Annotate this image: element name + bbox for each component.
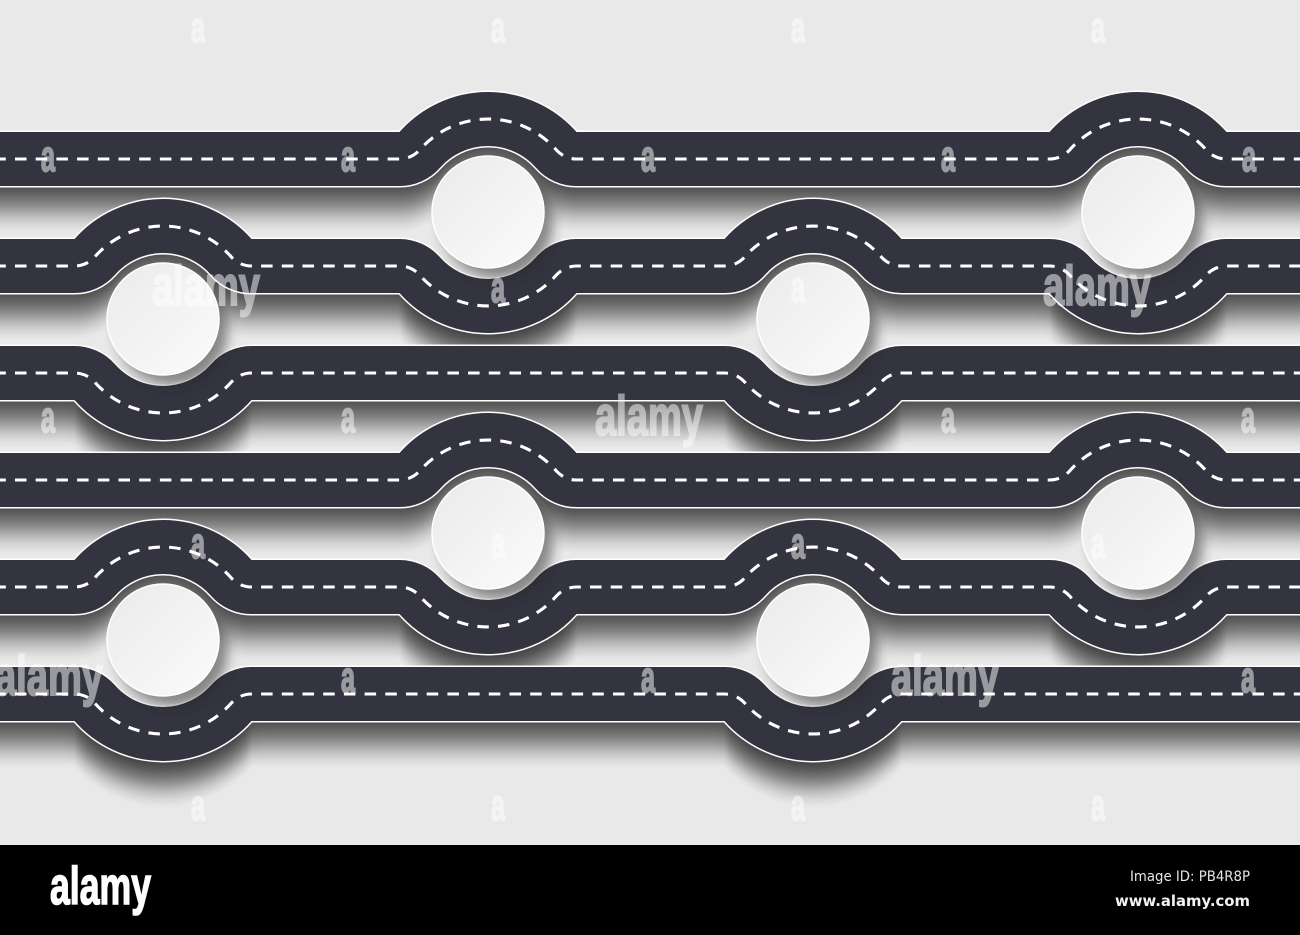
road 4 (0, 440, 1300, 480)
circle marker 2 (1082, 156, 1203, 278)
watermark overlay: a (1091, 519, 1105, 568)
road drop shadows (0, 122, 1300, 779)
circle marker 8 (757, 584, 878, 706)
circle marker 6 (1082, 477, 1203, 599)
watermark overlay: alamy (595, 384, 703, 447)
watermark overlay: a (1091, 781, 1105, 830)
circle marker 5 (432, 477, 553, 599)
road 1 (0, 119, 1300, 159)
watermark overlay: a (641, 653, 655, 702)
watermark overlay: a (791, 263, 805, 312)
watermark overlay: a (1242, 132, 1256, 181)
watermark overlay: a (191, 781, 205, 830)
watermark overlay: a (191, 3, 205, 52)
image id: Image ID: PB4R8P (1130, 869, 1250, 885)
circle marker 3 (107, 263, 228, 385)
footer bar (0, 845, 1300, 935)
road 6 (0, 694, 1300, 734)
website: www.alamy.com (1115, 892, 1250, 910)
footer logo: alamy (50, 857, 151, 916)
circle marker 4 (757, 263, 878, 385)
watermark overlay: a (491, 781, 505, 830)
watermark overlay: a (1091, 3, 1105, 52)
watermark overlay: alamy (1043, 254, 1151, 317)
watermark overlay: alamy (891, 644, 999, 707)
watermark overlay: a (1241, 393, 1255, 442)
soft bump shadows (95, 290, 1206, 749)
watermark overlay: a (941, 132, 955, 181)
circle marker 7 (107, 584, 228, 706)
watermark overlay: a (341, 132, 355, 181)
watermark overlay: a (191, 519, 205, 568)
watermark overlay: a (791, 3, 805, 52)
watermark overlay: a (641, 132, 655, 181)
watermark overlay: a (41, 132, 55, 181)
watermark overlay: a (941, 393, 955, 442)
watermark overlay: a (341, 653, 355, 702)
watermark overlay: a (1241, 653, 1255, 702)
watermark overlay: a (491, 263, 505, 312)
watermark overlay: a (791, 781, 805, 830)
road 5 (0, 547, 1300, 627)
road 3 (0, 373, 1300, 413)
watermark overlay: a (41, 393, 55, 442)
watermark overlay: a (341, 393, 355, 442)
watermark overlay: a (491, 519, 505, 568)
circle marker 1 (432, 156, 553, 278)
watermark overlay: a (491, 3, 505, 52)
road 2 (0, 226, 1300, 306)
watermark overlay: a (791, 519, 805, 568)
watermark overlay: alamy (152, 254, 260, 317)
